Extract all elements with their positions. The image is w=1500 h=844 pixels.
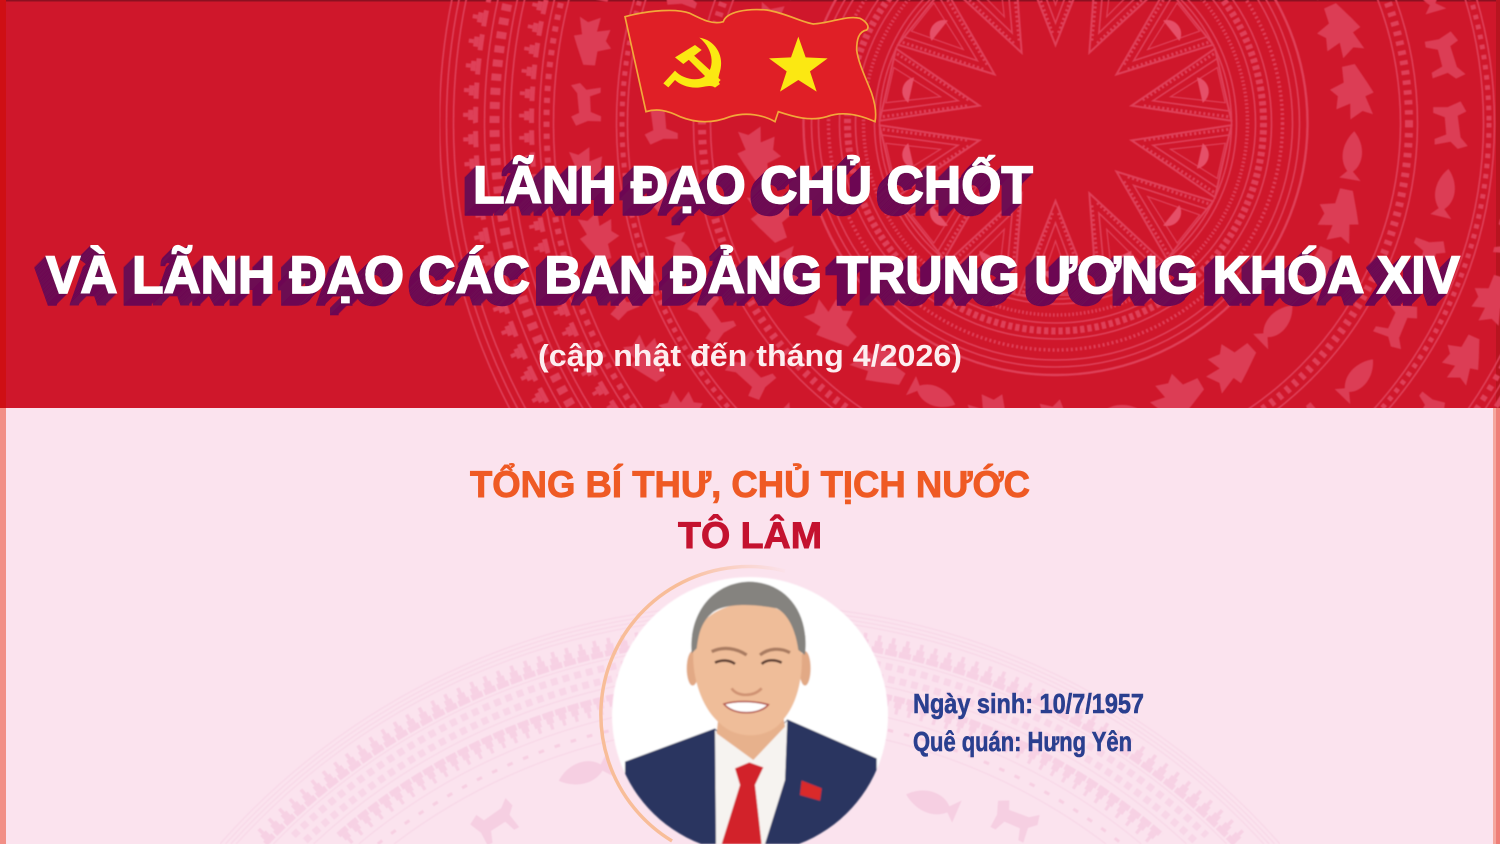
star rays of the drum xyxy=(880,0,1231,295)
title xyxy=(46,155,1460,305)
drum figures: middle ring xyxy=(616,0,1495,563)
title: LÃNH ĐẠO CHỦ CHỐT xyxy=(473,155,1033,215)
face xyxy=(693,603,802,735)
bronze drum pattern: header background xyxy=(440,0,1500,408)
section heading: position: TỔNG BÍ THƯ, CHỦ TỊCH NƯỚC xyxy=(470,462,1030,505)
bronze drum pattern: body background xyxy=(220,605,1280,844)
necktie xyxy=(722,762,763,844)
title: VÀ LÃNH ĐẠO CÁC BAN ĐẢNG TRUNG ƯƠNG KHÓA XIV xyxy=(46,245,1460,305)
icon: party and national flag xyxy=(625,10,876,122)
ears xyxy=(687,651,699,686)
shirt collar xyxy=(715,721,787,844)
smile xyxy=(724,702,768,713)
icon: hammer and sickle xyxy=(663,38,721,88)
icon: yellow star xyxy=(769,37,828,92)
portrait photo xyxy=(612,577,888,844)
panel: pink body xyxy=(0,408,1500,844)
subtitle: update date: (cập nhật đến tháng 4/2026) xyxy=(538,338,962,373)
neck xyxy=(717,717,785,760)
panel: red header xyxy=(0,0,1500,408)
section heading: name: TÔ LÂM xyxy=(678,514,822,556)
nose shade xyxy=(732,688,762,695)
drum figures: outer ring xyxy=(552,0,1500,635)
drum figures on pink xyxy=(467,752,1042,844)
eyes and brows xyxy=(712,648,790,655)
hair xyxy=(691,582,806,655)
decorative orange arc xyxy=(601,567,785,841)
biography details: Ngày sinh: 10/7/1957 xyxy=(913,688,1144,719)
biography details xyxy=(913,688,1144,757)
suit xyxy=(625,719,877,844)
lapel pin flag xyxy=(800,781,822,801)
biography details: Quê quán: Hưng Yên xyxy=(913,726,1132,757)
drum figures: inner ring xyxy=(738,0,1374,408)
